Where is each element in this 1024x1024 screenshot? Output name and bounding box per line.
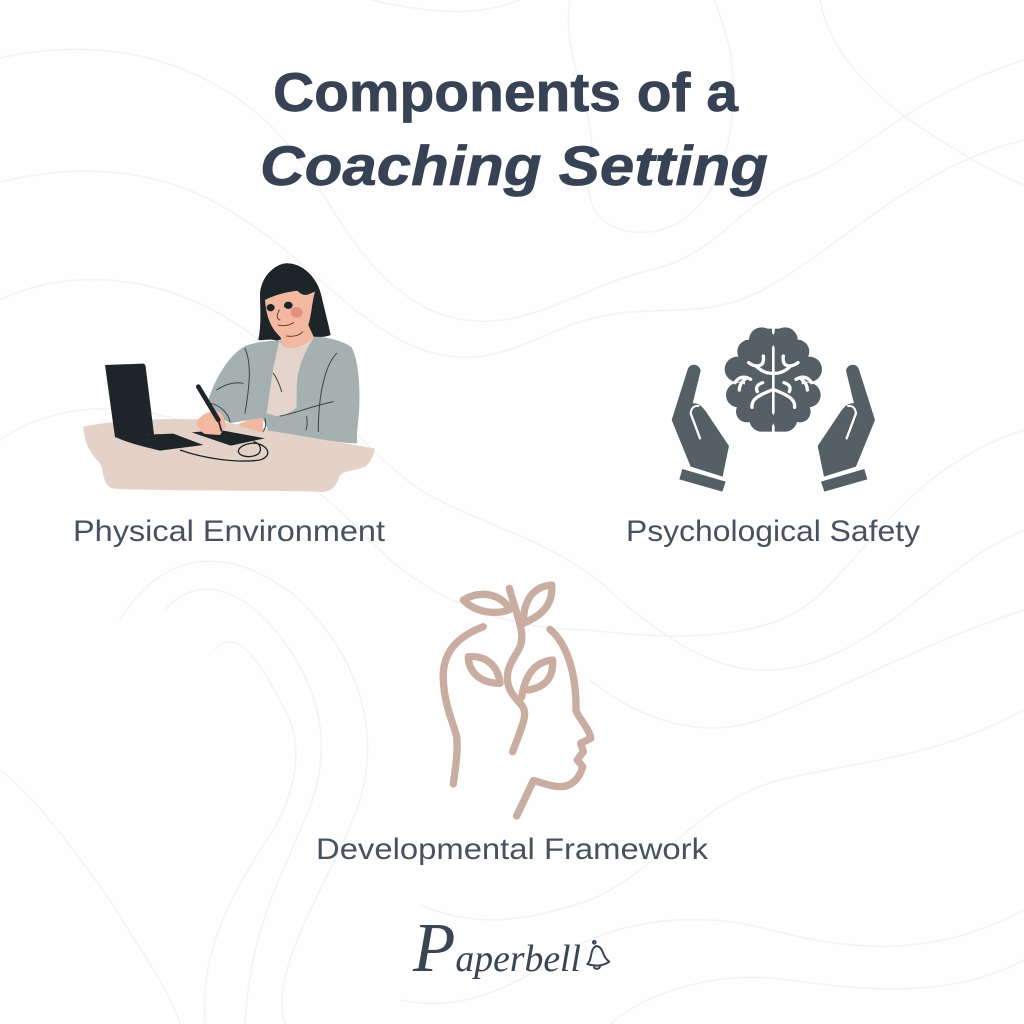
hair parting — [274, 267, 278, 287]
title: Coaching Setting — [260, 134, 768, 197]
icon: brain right half — [772, 327, 822, 432]
tablet — [192, 430, 265, 446]
icon: head profile with growing plant — [443, 585, 591, 816]
mouth and nose — [277, 310, 303, 336]
icon: hands holding a brain — [672, 327, 875, 492]
eyes — [267, 302, 293, 311]
label: physical environment: Physical Environment — [73, 515, 386, 548]
title: Components of a — [273, 61, 738, 123]
pen — [198, 387, 218, 420]
illustration: woman writing on a tablet at a desk with a laptop — [83, 263, 375, 492]
fringe — [263, 265, 315, 308]
icon: left hand — [672, 365, 729, 492]
cheek — [291, 307, 303, 318]
laptop base — [115, 434, 203, 451]
label: psychological safety: Psychological Safety — [626, 515, 920, 548]
hair back — [258, 263, 331, 341]
laptop screen — [105, 364, 154, 437]
cardigan fold lines — [210, 348, 337, 432]
label: developmental framework: Developmental Framework — [316, 833, 709, 866]
cable — [180, 442, 268, 461]
cardigan — [208, 336, 359, 443]
blouse — [267, 337, 314, 416]
logo: Paperbell wordmark: Paperbell — [412, 910, 581, 987]
icon: right hand — [818, 365, 875, 492]
right hand — [238, 419, 263, 433]
left hand — [197, 411, 227, 435]
desk — [83, 419, 375, 492]
face and neck — [265, 291, 315, 348]
icon: brain left half — [725, 327, 774, 432]
icon: bell — [587, 941, 609, 969]
title — [260, 61, 768, 197]
